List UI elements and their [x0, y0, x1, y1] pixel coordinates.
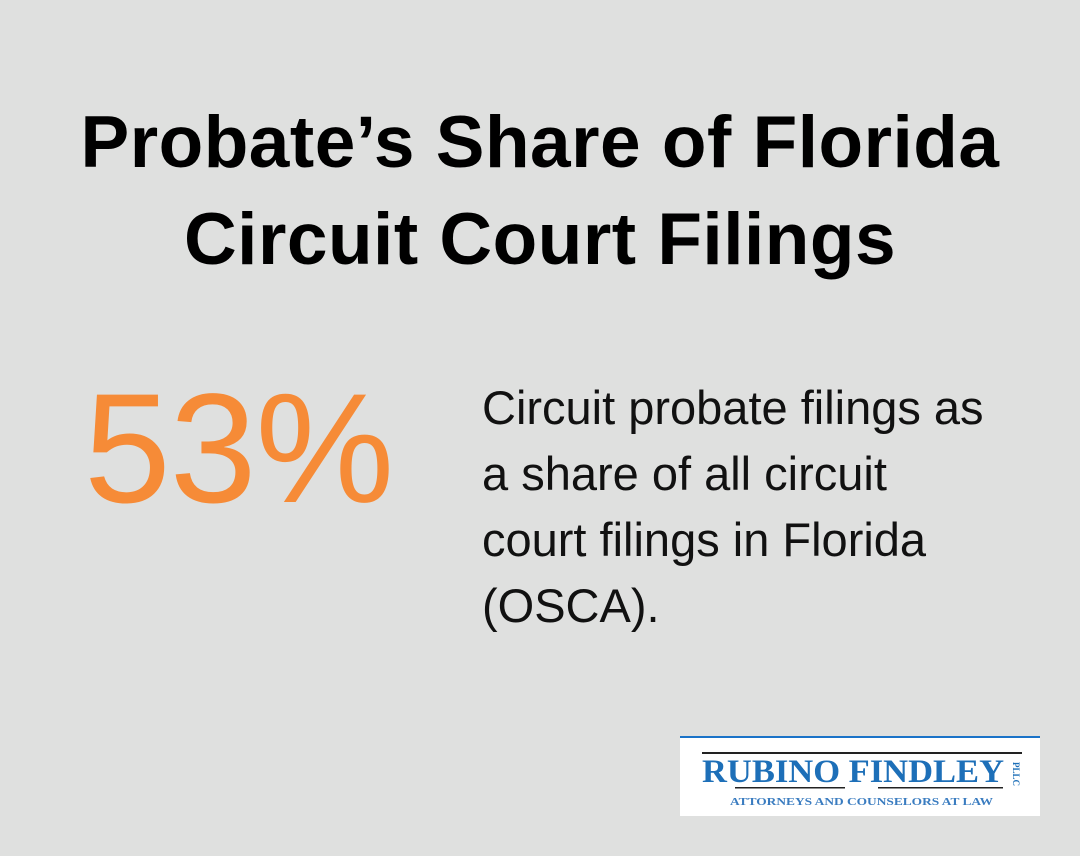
- description text: Circuit probate filings as: [482, 381, 984, 434]
- title: [81, 102, 1000, 280]
- title: Circuit Court Filings: [184, 199, 896, 280]
- description text: [482, 381, 984, 632]
- description text: (OSCA).: [482, 579, 660, 632]
- logo: [680, 736, 1040, 816]
- logo: RUBINO FINDLEY: [702, 754, 1004, 790]
- title: Probate’s Share of Florida: [81, 102, 999, 183]
- description text: a share of all circuit: [482, 447, 887, 500]
- logo: PLLC: [1011, 762, 1021, 786]
- description text: court filings in Florida: [482, 513, 926, 566]
- big stat: 53%: [84, 362, 393, 536]
- logo: ATTORNEYS AND COUNSELORS AT LAW: [730, 797, 994, 808]
